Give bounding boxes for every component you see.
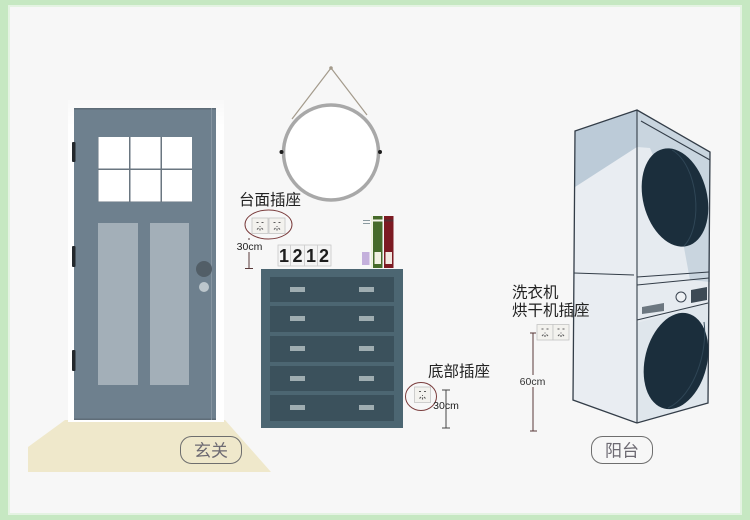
icon: washer sockets	[537, 324, 569, 340]
dimension: 60cm	[519, 333, 546, 431]
icon: door hinges	[72, 142, 76, 371]
heading: countertop socket: 台面插座	[239, 191, 301, 209]
dimension: 60cm: 60cm	[520, 376, 546, 388]
dimension: 30cm bottom	[433, 390, 459, 428]
icon: countertop sockets circled	[245, 210, 292, 239]
door frosted panels	[98, 223, 189, 385]
mirror	[280, 66, 382, 200]
heading: bottom socket: 底部插座	[428, 362, 490, 380]
label: entrance: 玄关	[194, 442, 228, 460]
panel: entrance door	[68, 100, 224, 422]
label: balcony: 阳台	[605, 442, 639, 460]
dimension: 30cm countertop	[236, 238, 263, 268]
heading: washer dryer socket: 洗衣机	[512, 284, 559, 302]
flip clock: 2	[319, 246, 329, 266]
heading: washer dryer socket	[512, 284, 590, 320]
floor mat	[28, 420, 271, 472]
flip clock: 2	[292, 246, 303, 266]
washer and dryer stack	[573, 110, 718, 423]
heading: washer dryer socket: 烘干机插座	[512, 302, 590, 320]
books and box	[362, 216, 394, 268]
door knob	[196, 261, 212, 292]
label: entrance	[180, 436, 242, 464]
icon: bottom socket circled	[406, 382, 436, 410]
flip clock	[278, 245, 331, 266]
dryer drum	[632, 141, 718, 254]
flip clock: 1	[306, 246, 316, 266]
washer drum	[634, 306, 718, 416]
dimension: 30cm countertop: 30cm	[237, 241, 263, 253]
dimension: 30cm bottom: 30cm	[433, 400, 459, 412]
door window	[98, 137, 192, 202]
flip clock: 1	[279, 246, 289, 266]
label: balcony	[592, 436, 652, 464]
chest of drawers	[261, 269, 403, 428]
washer control panel	[642, 287, 707, 314]
